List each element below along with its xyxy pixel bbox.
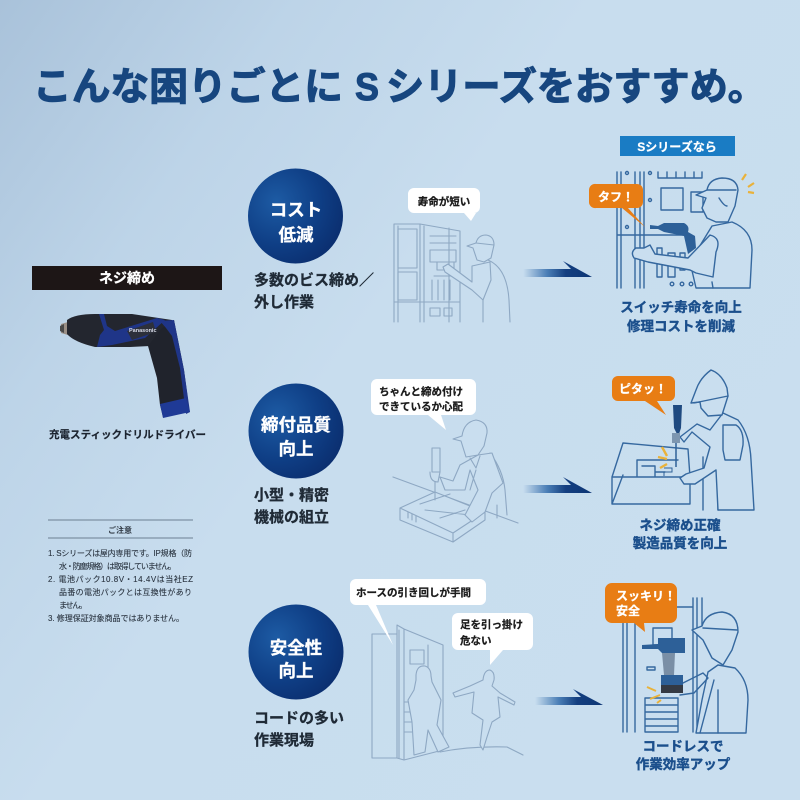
benefit text: ネジ締め正確 <box>640 517 721 533</box>
circle badge: fastening quality: 向上 <box>278 439 314 459</box>
circle badge: cost reduction: 低減 <box>278 225 314 245</box>
S series tag: Sシリーズなら <box>637 139 717 154</box>
task text: 小型・精密 <box>254 486 329 504</box>
speech bubble: hose is a hassle <box>350 579 486 645</box>
circle badge: safety: 安全性 <box>270 638 322 658</box>
notes: 3. 修理保証対象商品ではありません。 <box>48 613 184 623</box>
circle badge: safety: 向上 <box>278 661 314 681</box>
illustration: worker with stick driver <box>612 370 754 510</box>
task text: 機械の組立 <box>254 509 329 526</box>
circle badge: cost reduction <box>248 168 343 264</box>
panel: row 3 safety <box>248 579 748 772</box>
notes: ません。 <box>59 601 87 610</box>
arrow <box>523 477 592 493</box>
circle badge: safety <box>248 604 344 700</box>
notes: 品番の電池パックとは互換性があり <box>59 587 192 597</box>
icon: shine marks <box>742 174 754 193</box>
task text: 多数のビス締め／ <box>254 271 374 289</box>
arrow <box>523 261 592 277</box>
illustration: worker with drill <box>617 172 752 288</box>
task text: 外し作業 <box>254 293 314 311</box>
title: シリーズをおすすめ。 <box>386 66 766 109</box>
speech bubble: tripping hazard: 足を引っ掛け <box>460 618 523 631</box>
product heading bar <box>32 266 222 290</box>
callout: clean and safe <box>605 583 677 632</box>
callout: tough <box>589 184 645 227</box>
circle badge: fastening quality: 締付品質 <box>261 415 331 435</box>
speech bubble: tripping hazard: 危ない <box>460 634 492 647</box>
benefit text <box>633 517 727 551</box>
icon: spark marks <box>647 687 661 703</box>
panel: row 1 cost reduction <box>248 168 754 334</box>
stick driver tool <box>664 405 682 476</box>
benefit text: 作業効率アップ <box>636 757 731 772</box>
product caption: 充電スティックドリルドライバー <box>49 428 206 441</box>
cordless impact tool <box>642 638 685 693</box>
notes: 1. Sシリーズは屋内専用です。IP規格（防 <box>48 548 192 558</box>
illustration: worker with cordless tool <box>623 598 748 733</box>
callout: snug: ピタッ！ <box>619 382 667 396</box>
circle badge: cost reduction: コスト <box>270 200 322 220</box>
task text: コードの多い <box>254 709 344 727</box>
arrow <box>535 689 603 705</box>
speech bubble: short life: 寿命が短い <box>418 195 470 208</box>
notes: 水・防塵規格）は取得していません。 <box>59 561 176 571</box>
illustration: workers tripping on cords <box>372 625 523 760</box>
speech bubble: worried: ちゃんと締め付け <box>379 385 463 398</box>
S series tag <box>620 136 735 156</box>
circle badge: fastening quality <box>248 384 344 478</box>
notes: ご注意 <box>108 525 132 535</box>
icon: spark marks <box>658 447 667 468</box>
drill in use <box>650 223 696 254</box>
speech bubble: worried <box>371 379 476 430</box>
benefit text: コードレスで <box>642 739 724 754</box>
panel: row 2 fastening quality <box>248 370 754 551</box>
task text: 作業現場 <box>254 731 314 749</box>
speech bubble: worried: できているか心配 <box>379 400 463 413</box>
title: S <box>355 66 379 109</box>
callout: snug <box>612 376 675 415</box>
illustration: worker at switchboard <box>394 224 510 322</box>
callout: clean and safe: スッキリ！ <box>616 589 676 603</box>
benefit text <box>620 299 742 334</box>
speech bubble: hose is a hassle: ホースの引き回しが手間 <box>356 586 471 599</box>
icon: cordless stick drill driver: Panasonic <box>129 328 157 334</box>
icon: cordless stick drill driver <box>60 314 190 418</box>
task text <box>254 271 374 311</box>
panel: product <box>32 266 222 623</box>
task text <box>254 486 329 526</box>
product heading bar: ネジ締め <box>99 270 155 286</box>
illustration: worker assembling <box>393 420 518 542</box>
benefit text: スイッチ寿命を向上 <box>620 299 742 315</box>
callout: clean and safe: 安全 <box>616 603 640 618</box>
benefit text <box>636 739 731 772</box>
speech bubble: tripping hazard <box>452 613 533 665</box>
title <box>33 66 766 109</box>
speech bubble: short life <box>408 188 480 221</box>
benefit text: 修理コストを削減 <box>627 318 735 334</box>
title: こんな困りごとに <box>33 66 343 109</box>
task text <box>254 709 344 749</box>
callout: tough: タフ！ <box>598 190 634 204</box>
benefit text: 製造品質を向上 <box>633 535 727 551</box>
notes <box>48 520 193 623</box>
notes: 2. 電池パック10.8V・14.4Vは当社EZ <box>48 574 193 584</box>
